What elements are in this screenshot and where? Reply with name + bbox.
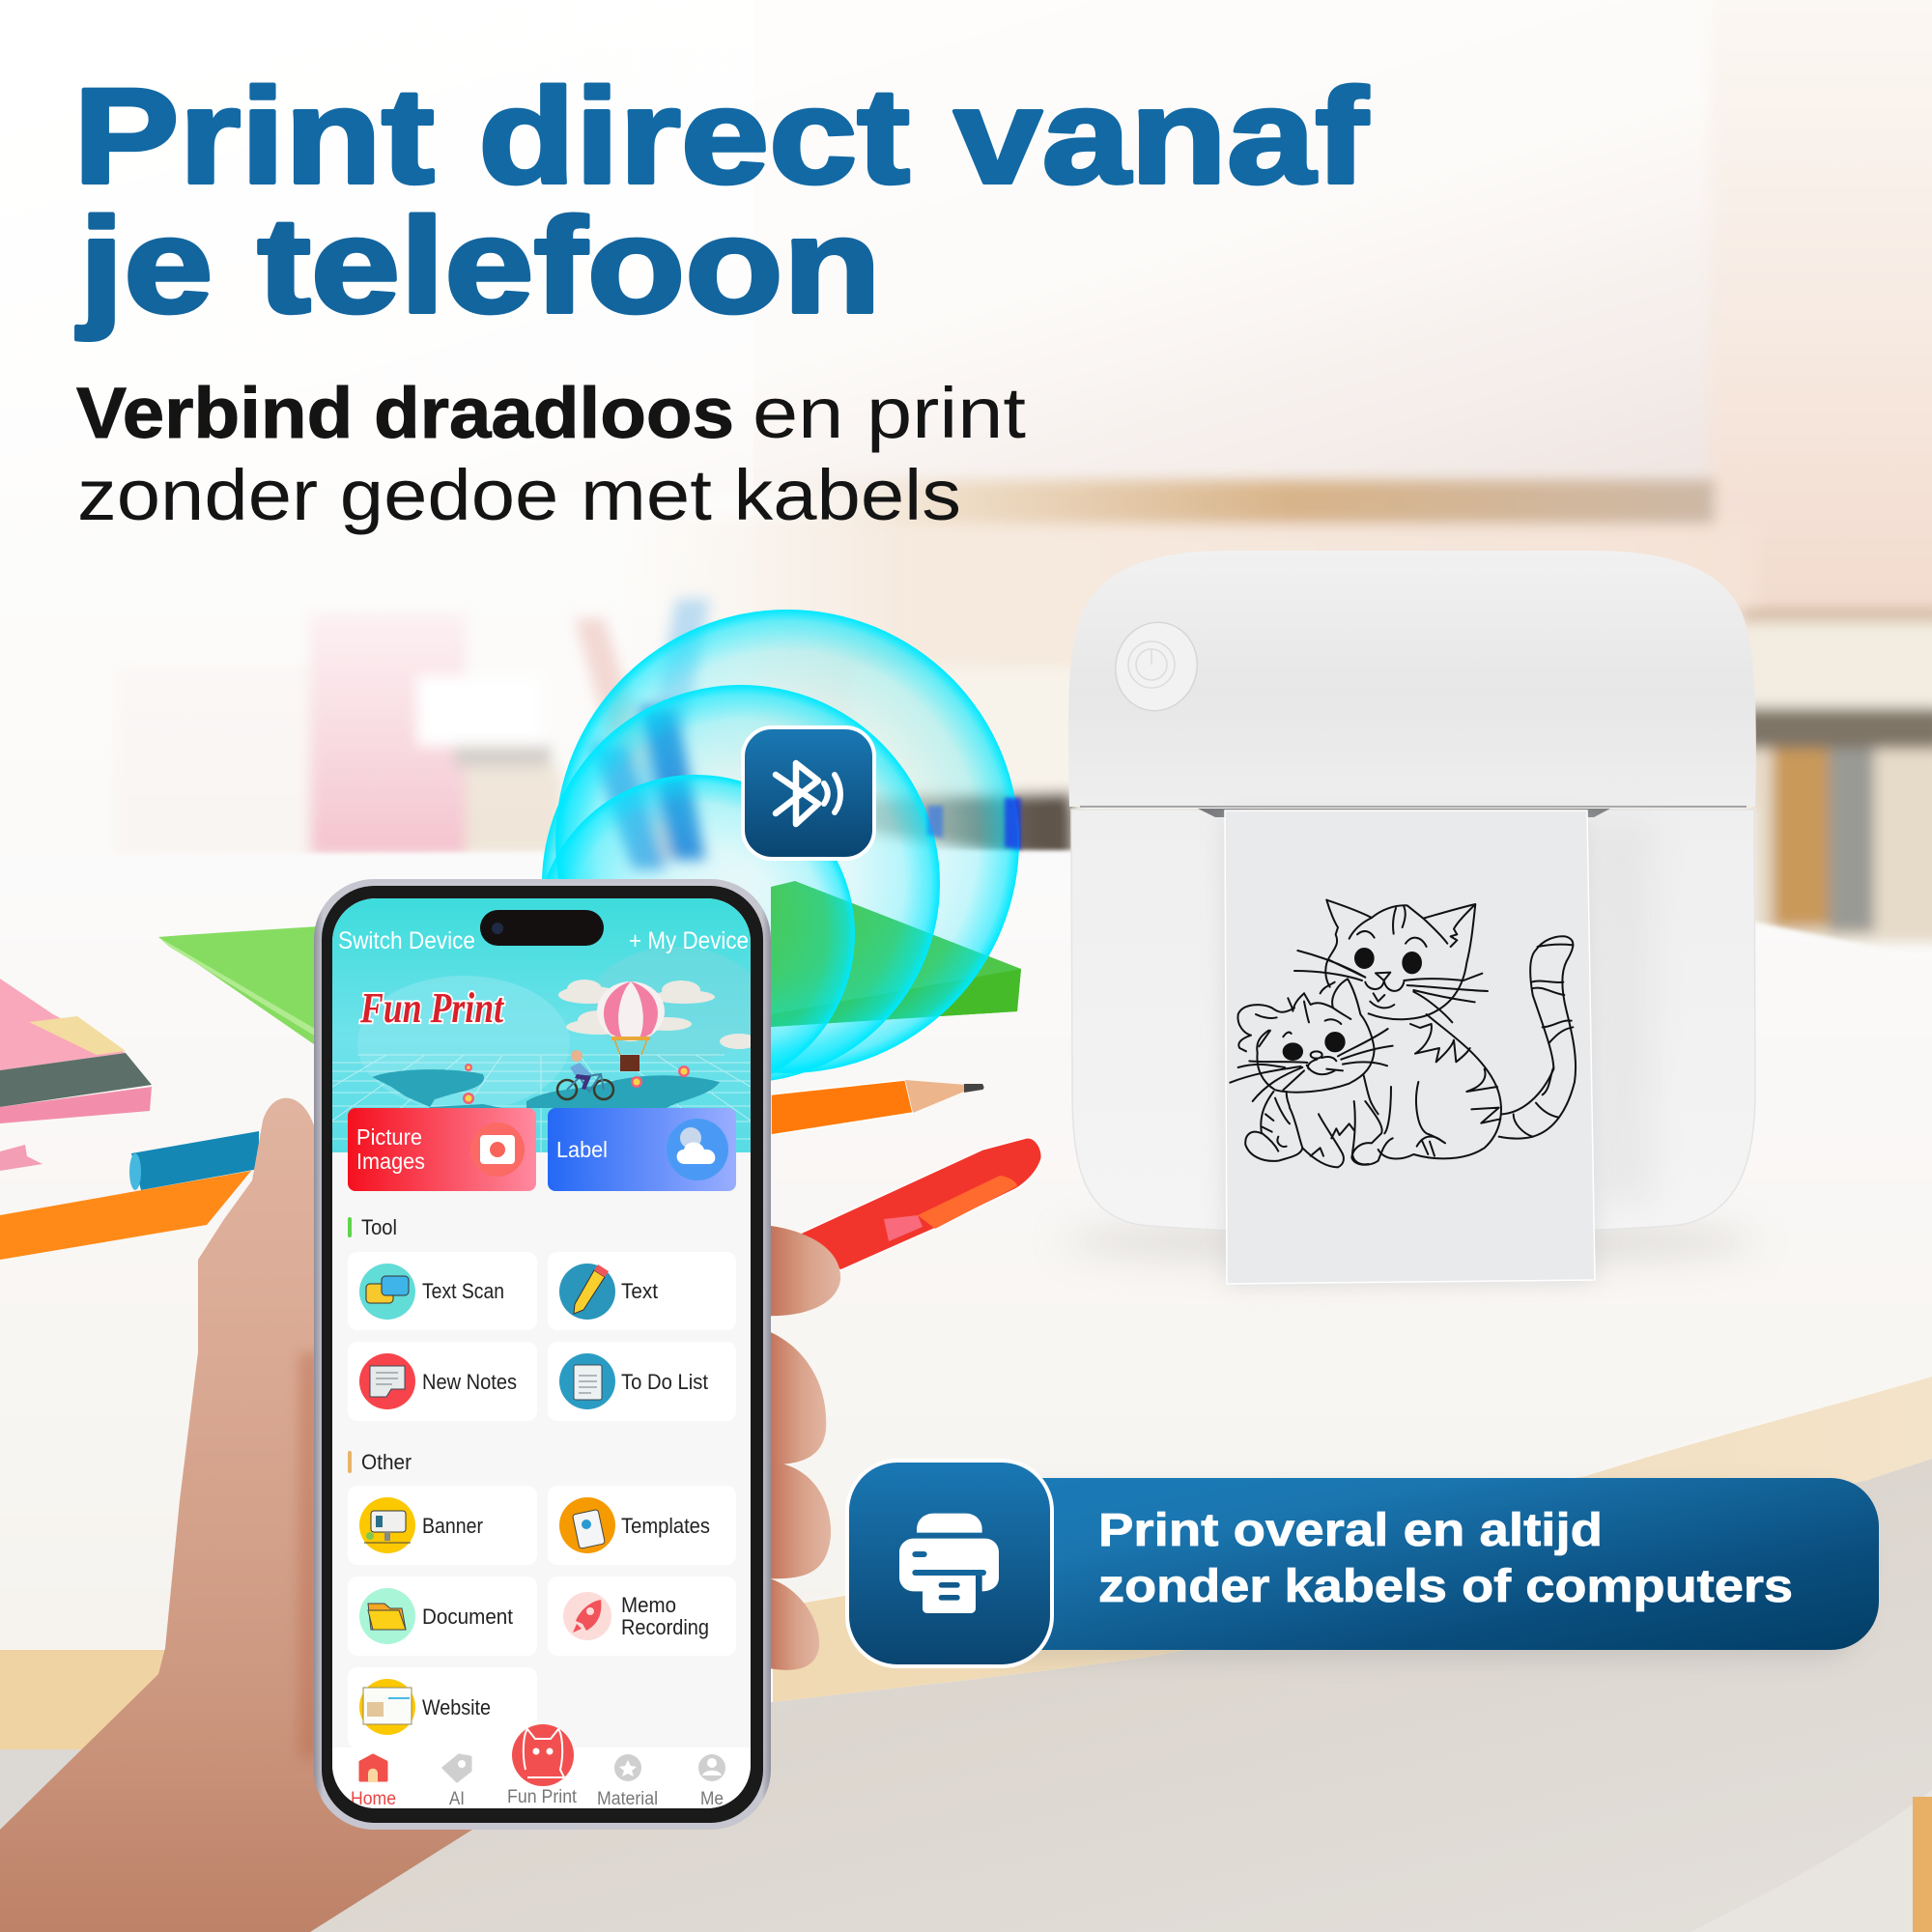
cat line drawing <box>1230 900 1576 1167</box>
tab: home: Home <box>351 1789 396 1809</box>
card: website: Website <box>422 1695 491 1719</box>
hot air balloon <box>597 981 665 1071</box>
phone <box>314 879 771 1830</box>
card: website <box>359 1679 491 1735</box>
tab: material: Material <box>597 1789 658 1809</box>
card: text scan <box>359 1264 503 1320</box>
world map <box>372 1069 720 1108</box>
orange pencil <box>771 1080 983 1135</box>
printer icon tile <box>847 1461 1052 1666</box>
blue glow where waves cross the dark shelf <box>927 798 1021 850</box>
card: to do list: To Do List <box>621 1370 708 1394</box>
blue shortcut: label: Label <box>556 1137 608 1162</box>
card: to do list <box>559 1353 708 1409</box>
subtitle: Verbind draadloos <box>76 373 734 453</box>
tab: fun print cat button <box>507 1724 578 1807</box>
subtitle: zonder gedoe met kabels <box>77 455 961 535</box>
banner bar with text: zonder kabels of computers <box>1098 1561 1793 1612</box>
orange marker <box>0 1171 251 1260</box>
soft white veil over the left wall <box>0 0 753 831</box>
cyclist <box>557 1050 613 1099</box>
map pins <box>463 1064 690 1104</box>
status row text <box>339 931 748 953</box>
red shortcut: picture images: Picture <box>356 1124 422 1150</box>
big cat <box>1294 900 1576 1165</box>
tab: me <box>698 1754 725 1809</box>
card: new notes <box>359 1353 516 1409</box>
small cat <box>1230 979 1393 1167</box>
card: document <box>359 1588 513 1644</box>
power button <box>1106 613 1207 720</box>
card: document: Document <box>422 1605 513 1629</box>
blue shortcut: label <box>548 1108 736 1191</box>
tab: home <box>351 1755 396 1809</box>
pen holder with blurred pencils <box>575 599 710 869</box>
callout banner <box>847 1461 1879 1666</box>
bluetooth badge <box>743 727 874 859</box>
card: memo recording <box>563 1592 708 1640</box>
fun print logo: Fun Print <box>359 984 504 1032</box>
title: je telefoon <box>75 189 881 341</box>
tool section heading <box>348 1217 396 1237</box>
banner bar with text <box>995 1478 1879 1650</box>
card: banner <box>359 1497 483 1553</box>
green folder <box>158 881 1021 1051</box>
card: templates: Templates <box>621 1514 710 1538</box>
printer <box>1063 551 1758 1284</box>
tab: me: Me <box>700 1789 724 1809</box>
hand: palm and thumb <box>0 1098 483 1932</box>
card: text scan: Text Scan <box>422 1279 504 1303</box>
tab: material <box>597 1754 658 1809</box>
tab: ai <box>443 1755 470 1809</box>
title <box>73 60 1368 341</box>
card: templates <box>559 1497 709 1553</box>
red shortcut: picture images: Images <box>356 1149 425 1174</box>
hand: fingers <box>763 1225 840 1670</box>
notebooks <box>0 979 152 1171</box>
hand: shading beside phone <box>299 1352 319 1758</box>
tab: ai: AI <box>449 1789 465 1809</box>
card: memo recording: Recording <box>621 1615 709 1639</box>
subtitle <box>76 373 1026 535</box>
banner bar with text: Print overal en altijd <box>1098 1505 1603 1556</box>
red shortcut: picture images <box>348 1108 536 1191</box>
app header illustration <box>332 898 763 1152</box>
card: new notes: New Notes <box>422 1370 517 1394</box>
clouds <box>558 980 758 1049</box>
title: Print direct vanaf <box>73 60 1368 212</box>
card: text: Text <box>621 1279 658 1303</box>
tab: fun print cat button: Fun Print <box>507 1787 578 1807</box>
subtitle: en print <box>753 373 1026 453</box>
bottom tab bar <box>332 1724 751 1809</box>
status row text: Switch Device <box>338 927 475 954</box>
card: text <box>559 1264 658 1320</box>
tool section heading: Tool <box>361 1215 397 1239</box>
blue marker <box>129 1131 259 1190</box>
tail <box>1499 936 1576 1139</box>
red pen <box>800 1138 1041 1270</box>
printed paper with cats <box>1225 810 1595 1284</box>
other section heading: Other <box>361 1450 412 1474</box>
status row text: + My Device <box>629 927 749 954</box>
card: memo recording: Memo <box>621 1593 676 1617</box>
card: banner: Banner <box>422 1514 483 1538</box>
dynamic island <box>480 910 604 946</box>
phone screen <box>332 898 763 1809</box>
bluetooth signal waves <box>536 610 1019 1094</box>
